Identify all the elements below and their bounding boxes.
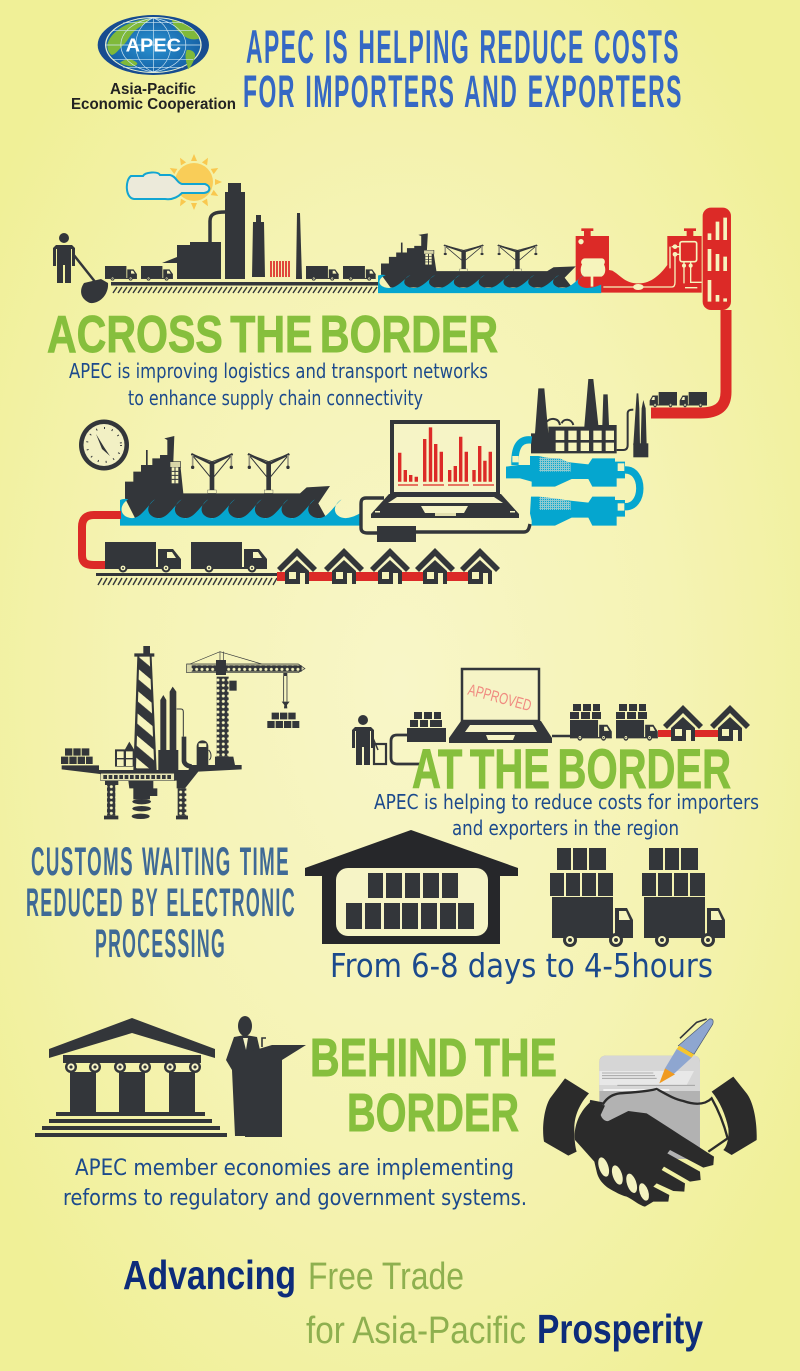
pen — [659, 1019, 713, 1083]
logo caption: Asia-Pacific — [110, 81, 196, 98]
icon: small trucks — [105, 266, 376, 281]
icon: laptop approved: APPROVED — [466, 682, 533, 715]
text: behind the border description: APEC member economies are implementing — [75, 1156, 514, 1181]
red pipe to second chain — [651, 310, 726, 413]
icon: big trucks with crates — [550, 848, 725, 947]
icon: refinery red — [576, 208, 731, 310]
icon: blue connectors — [506, 440, 640, 526]
footer tagline: for Asia-Pacific — [306, 1310, 526, 1352]
icon: laptop with bar chart — [361, 422, 530, 542]
text: at the border description: and exporters in the region — [452, 816, 679, 840]
icon: two houses — [658, 705, 750, 741]
icon: row of houses — [277, 548, 500, 584]
handshake — [543, 1077, 757, 1207]
icon: handshake with document and pen — [543, 1019, 757, 1207]
icon: laptop approved — [449, 669, 552, 743]
cable — [552, 735, 570, 737]
rail track bottom — [96, 573, 277, 585]
icon: pressure gauge — [79, 420, 129, 470]
header — [71, 15, 683, 117]
text: behind the border description — [63, 1156, 527, 1211]
logo: APEC — [98, 15, 209, 75]
document — [599, 1056, 700, 1159]
heading: behind the border: BORDER — [347, 1083, 519, 1143]
text: customs waiting time: PROCESSING — [95, 922, 226, 966]
panel: at the border top chain — [352, 669, 750, 765]
text: across the border description — [69, 359, 488, 410]
icon: factory small — [531, 379, 648, 457]
icon: cargo ship top — [378, 233, 601, 293]
icon: cargo ship bottom — [120, 436, 360, 526]
text: CUSTOMS WAITING TIME — [31, 840, 290, 884]
icon: government building — [35, 1018, 227, 1137]
icon: warehouse with boxes — [305, 830, 518, 944]
footer tagline: Advancing — [123, 1252, 296, 1298]
text: REDUCED BY ELECTRONIC — [26, 881, 296, 925]
icon: delivery trucks — [105, 542, 267, 572]
icon: speaker at podium — [226, 1016, 306, 1137]
red pipe left — [82, 515, 121, 565]
panel: across the border supply chain top — [53, 154, 731, 310]
heading: across the border: ACROSS THE BORDER — [47, 306, 498, 364]
connector cable — [391, 735, 420, 764]
footer tagline: Prosperity — [537, 1306, 703, 1352]
icon: factory — [162, 183, 302, 279]
rail track — [111, 282, 379, 293]
icon: crates on box — [407, 712, 446, 742]
text: at the border description — [374, 790, 759, 840]
logo caption: Economic Cooperation — [71, 96, 236, 113]
logo caption — [71, 81, 236, 113]
heading: behind the border: BEHIND THE — [310, 1028, 557, 1088]
stat: from 6-8 days to 4-5 hours: From 6-8 days to 4-5hours — [330, 946, 713, 985]
tower crane — [187, 652, 305, 757]
text: customs waiting time — [26, 840, 296, 966]
text: across the border description: APEC is improving logistics and transport networks — [69, 359, 488, 383]
icon: small trucks facing left — [650, 392, 707, 407]
icon: miner with shovel — [53, 233, 108, 303]
logo: APEC: APEC — [126, 35, 181, 56]
icon: traveller with bag — [352, 715, 386, 765]
title — [243, 20, 683, 117]
icon: oil rig and tower crane — [61, 646, 305, 819]
icon: sun and cloud — [127, 154, 222, 210]
footer tagline: Free Trade — [308, 1256, 464, 1298]
heading: behind the border — [310, 1028, 557, 1143]
oil rig — [61, 646, 242, 819]
panel: across the border supply chain bottom — [79, 379, 707, 585]
icon: trucks with crates — [570, 704, 658, 741]
footer tagline — [123, 1252, 703, 1352]
text: behind the border description: reforms to regulatory and government systems. — [63, 1186, 527, 1211]
text: across the border description: to enhance supply chain connectivity — [128, 386, 423, 410]
